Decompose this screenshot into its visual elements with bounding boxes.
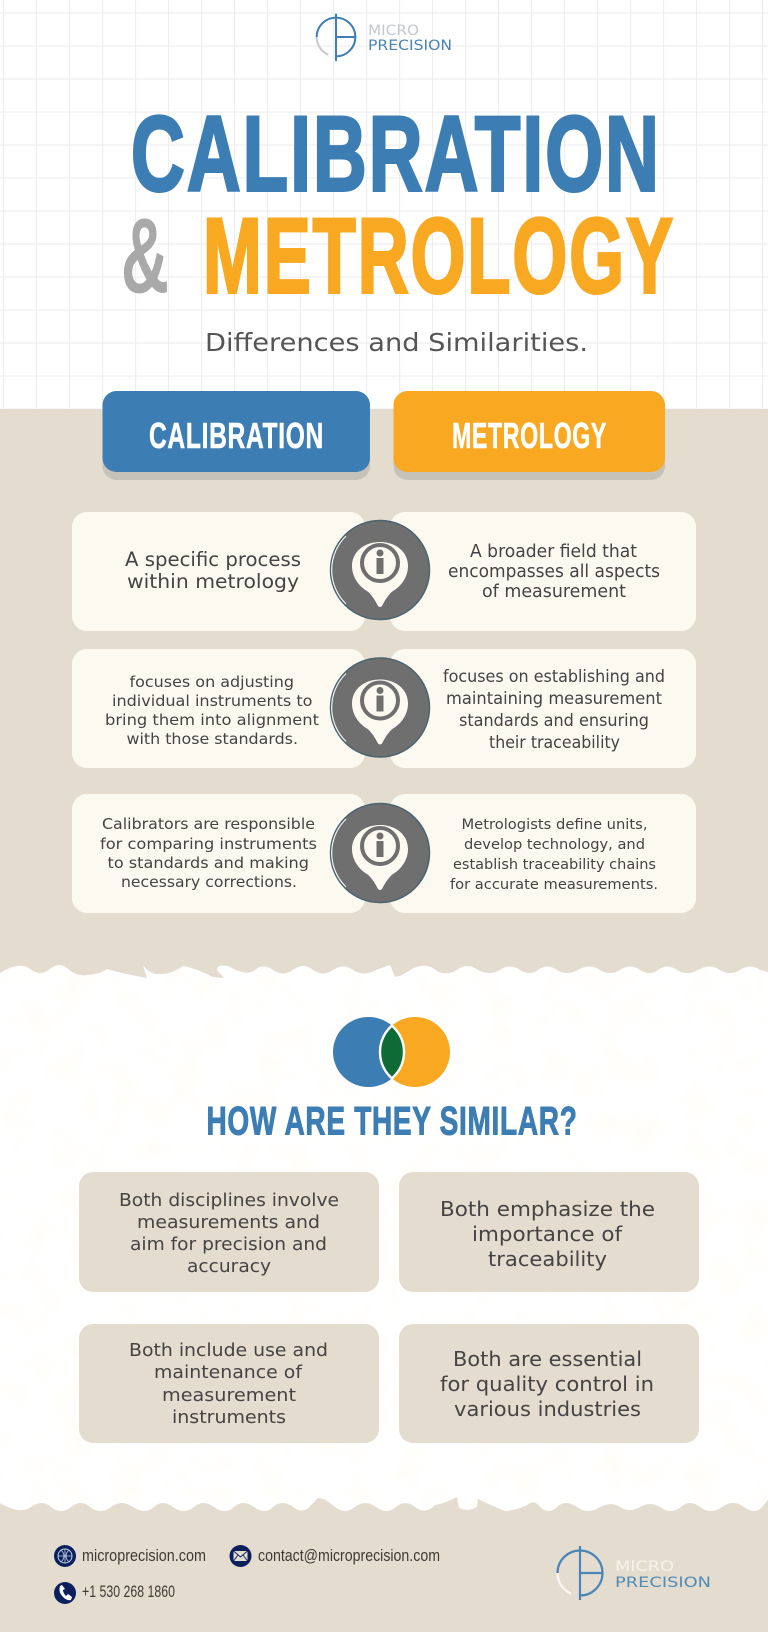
grid paper background xyxy=(0,0,768,410)
logo wordmark xyxy=(368,23,452,54)
contact: website xyxy=(54,1545,206,1567)
logo wordmark: MICRO xyxy=(615,1559,674,1575)
title line: ampersand: & xyxy=(121,196,169,316)
card: instruments: Both include use and xyxy=(129,1340,328,1361)
card: metrology definition xyxy=(390,512,696,631)
card: metrology definition: of measurement xyxy=(482,582,626,602)
card: traceability xyxy=(399,1172,699,1292)
card: metrology definition: A broader field that xyxy=(470,542,637,562)
logo mark xyxy=(558,1546,602,1600)
card: instruments: measurement xyxy=(162,1385,296,1406)
card: precision and accuracy: aim for precision and xyxy=(130,1234,327,1255)
card: metrologists: establish traceability chains xyxy=(453,857,656,873)
button: metrology xyxy=(394,391,665,480)
button: calibration: CALIBRATION xyxy=(149,415,324,456)
logo: top xyxy=(317,14,452,61)
heading: how are they similar: HOW ARE THEY SIMILAR? xyxy=(206,1100,578,1144)
card: precision and accuracy: Both disciplines involve xyxy=(119,1190,339,1211)
logo wordmark xyxy=(615,1559,711,1591)
logo wordmark: PRECISION xyxy=(368,38,452,54)
footer band xyxy=(0,1497,768,1632)
card: quality control: various industries xyxy=(454,1397,641,1421)
card: instruments: instruments xyxy=(172,1407,286,1428)
card: calibrators: for comparing instruments xyxy=(100,835,317,853)
card: calibration focus: bring them into alignment xyxy=(105,711,319,729)
tan band: differences section xyxy=(0,409,768,978)
icon: info pin xyxy=(330,658,430,757)
icon: info pin xyxy=(330,520,430,620)
contact: email: contact@microprecision.com xyxy=(258,1547,440,1565)
comparison row 1 xyxy=(72,512,696,631)
button: calibration xyxy=(102,391,370,480)
card: calibration focus: with those standards. xyxy=(126,730,298,748)
card: metrology definition: encompasses all aspects xyxy=(448,562,660,582)
card: calibrators: necessary corrections. xyxy=(121,873,297,891)
button: metrology: METROLOGY xyxy=(452,415,607,456)
card: metrologists xyxy=(390,794,696,913)
title xyxy=(121,94,675,316)
contact: website: microprecision.com xyxy=(82,1547,206,1565)
card: quality control xyxy=(399,1324,699,1443)
card: metrologists: develop technology, and xyxy=(464,837,645,853)
card: metrology focus: focuses on establishing and xyxy=(443,667,665,686)
logo: footer xyxy=(558,1546,711,1600)
card: calibrators: Calibrators are responsible xyxy=(102,815,315,833)
card: metrology focus xyxy=(390,649,696,768)
icon: venn diagram xyxy=(333,1017,450,1087)
logo mark xyxy=(317,14,355,61)
card: traceability: importance of xyxy=(472,1222,623,1246)
card: quality control: for quality control in xyxy=(440,1372,654,1396)
contact: phone: +1 530 268 1860 xyxy=(82,1583,175,1601)
card: precision and accuracy xyxy=(79,1172,379,1292)
comparison row 2 xyxy=(72,649,696,768)
contact: email xyxy=(230,1545,440,1567)
card: metrology focus: maintaining measurement xyxy=(446,689,663,708)
card: precision and accuracy: measurements and xyxy=(137,1212,320,1233)
card: traceability: Both emphasize the xyxy=(440,1197,655,1221)
icon: envelope xyxy=(230,1545,252,1567)
contact: phone xyxy=(54,1582,175,1604)
card: calibration definition: within metrology xyxy=(127,570,299,593)
card: metrology focus: their traceability xyxy=(489,733,620,752)
card: calibration focus: individual instruments to xyxy=(112,692,312,710)
card: instruments xyxy=(79,1324,379,1443)
card: instruments: maintenance of xyxy=(154,1362,303,1383)
card: metrology focus: standards and ensuring xyxy=(459,711,649,730)
card: calibration definition: A specific process xyxy=(125,548,301,571)
icon: globe xyxy=(54,1545,76,1567)
logo wordmark: MICRO xyxy=(368,23,419,39)
card: precision and accuracy: accuracy xyxy=(187,1256,271,1277)
card: metrologists: Metrologists define units, xyxy=(462,817,648,833)
card: calibration focus xyxy=(72,649,365,768)
icon: phone xyxy=(54,1582,76,1604)
card: traceability: traceability xyxy=(488,1247,607,1271)
card: calibration focus: focuses on adjusting xyxy=(130,673,294,691)
logo wordmark: PRECISION xyxy=(615,1575,711,1591)
card: calibrators xyxy=(72,794,365,913)
card: quality control: Both are essential xyxy=(453,1347,642,1371)
comparison row 3 xyxy=(72,794,696,913)
card: metrologists: for accurate measurements. xyxy=(450,877,658,893)
icon: info pin xyxy=(330,804,430,902)
card: calibrators: to standards and making xyxy=(108,854,309,872)
subtitle: Differences and Similarities. xyxy=(205,328,588,357)
card: calibration definition xyxy=(72,512,365,631)
speckled paper background xyxy=(0,965,768,1510)
